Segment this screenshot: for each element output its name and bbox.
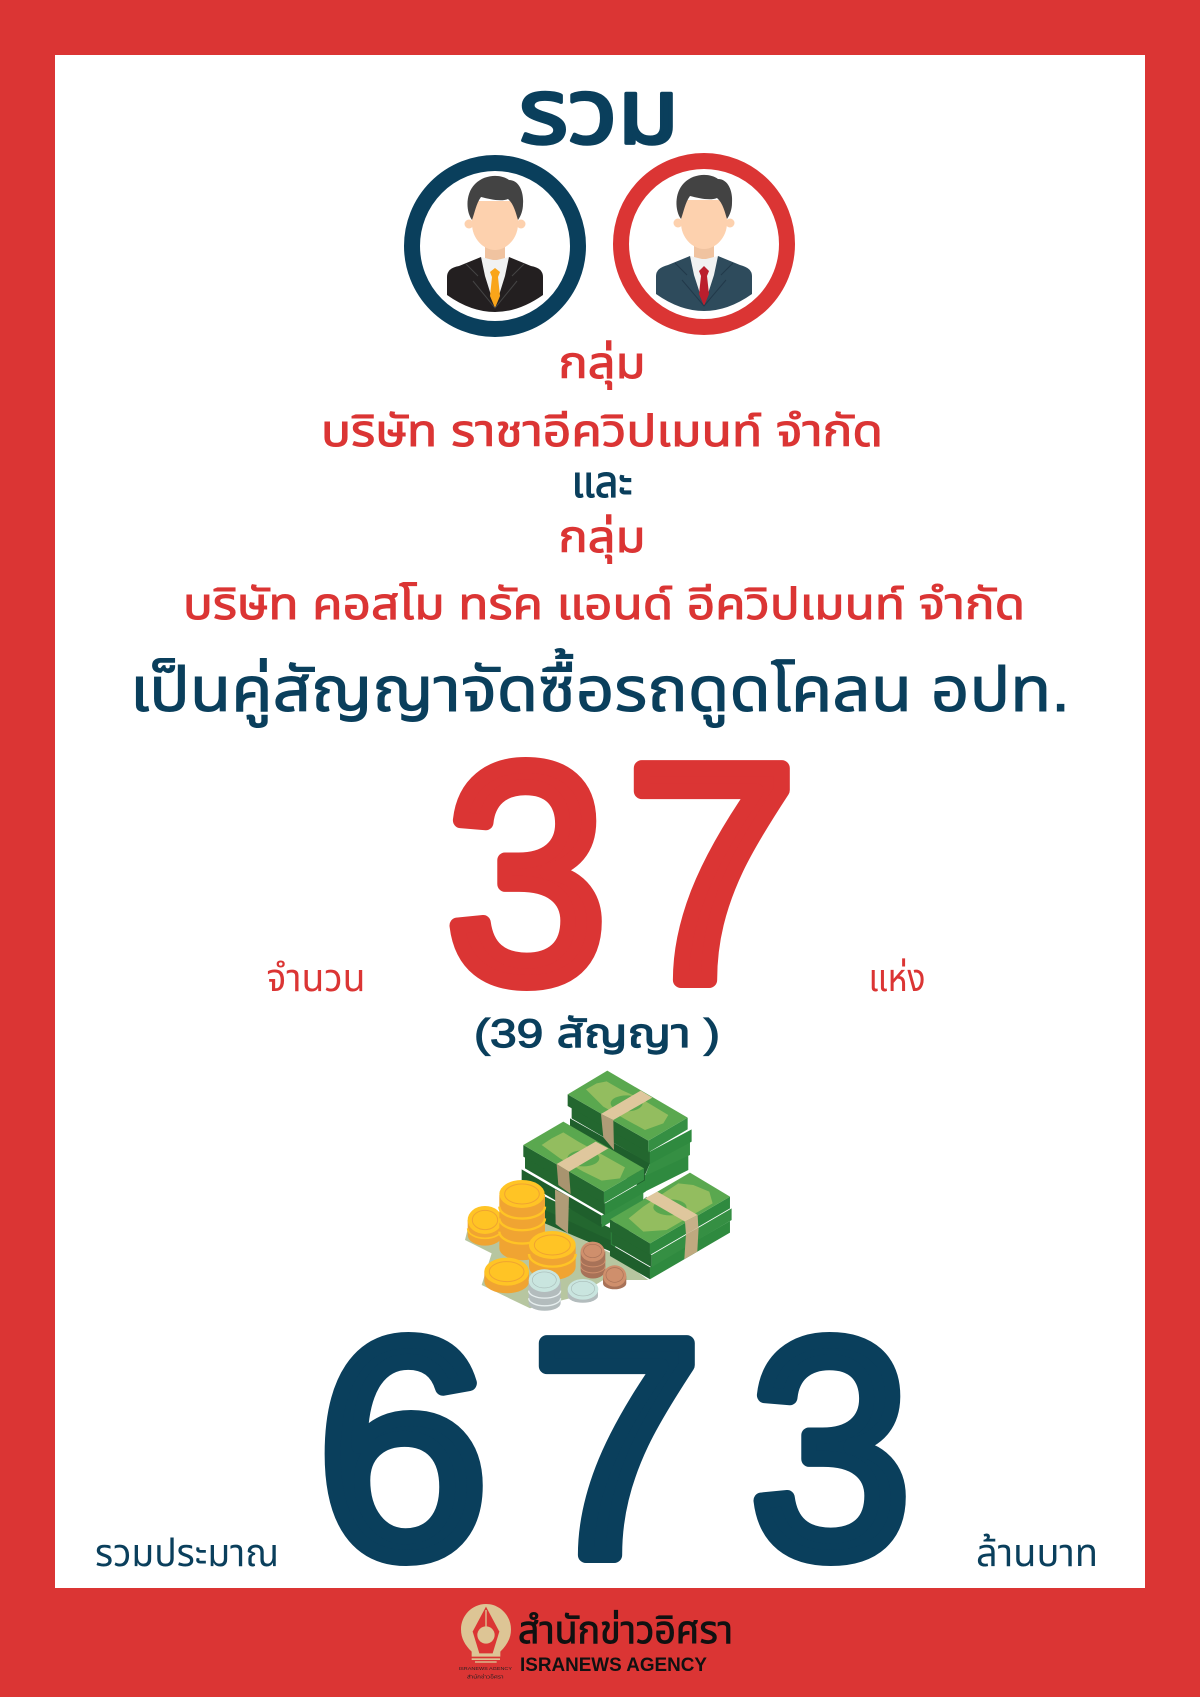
big number 37: 3 (446, 702, 607, 1046)
icon: businessman in red ring (621, 161, 787, 327)
gold coin stack left (468, 1206, 502, 1246)
copper coin stacks (581, 1242, 626, 1289)
label: total approx: รวมประมาณ (95, 1533, 279, 1575)
icon: businessman in navy ring (412, 163, 578, 329)
heading: group label 2: กลุ่ม (558, 513, 646, 564)
label: places: แห่ง (868, 958, 926, 1000)
big number 37: 7 (626, 702, 797, 1046)
heading: group label 1: กลุ่ม (558, 339, 646, 390)
text: and: และ (572, 458, 632, 507)
label: amount: จำนวน (266, 958, 366, 1000)
gold coin stack right (529, 1231, 576, 1280)
big number 673: 7 (531, 1277, 702, 1621)
heading: company 2: บริษัท คอสโม ทรัค แอนด์ อีควิปเมนท์ จำกัด (183, 580, 1025, 629)
silver coin stacks (529, 1269, 598, 1311)
label: million baht: ล้านบาท (976, 1533, 1098, 1575)
big number 673: 6 (317, 1277, 488, 1621)
icon: pen nib bulb emblem (459, 1604, 512, 1680)
sub-label: 39 contracts: (39 สัญญา ) (474, 1012, 720, 1056)
big number 673: 3 (750, 1277, 911, 1621)
icon: money stacks and coins (465, 1071, 732, 1311)
heading: company 1: บริษัท ราชาอีควิปเมนท์ จำกัด (321, 407, 883, 456)
gold coin stack tall (499, 1180, 545, 1260)
back banknote stack (568, 1071, 692, 1192)
icon: pen nib bulb emblem: สำนักข่าวอิศรา (467, 1673, 504, 1680)
stat: 673 million baht (95, 1277, 1098, 1621)
heading: contract statement: เป็นคู่สัญญาจัดซื้อรถดูดโคลน อปท. (130, 648, 1070, 728)
gold coin low (484, 1258, 529, 1293)
logo name English: ISRANEWS AGENCY (520, 1654, 707, 1676)
big number 37 (446, 702, 797, 1046)
shadow (465, 1222, 648, 1308)
title: รวม (519, 63, 679, 163)
front banknote stack (610, 1173, 732, 1279)
middle banknote stack (522, 1122, 647, 1252)
logo name Thai: สำนักข่าวอิศรา (518, 1610, 733, 1652)
icon: pen nib bulb emblem: ISRANEWS AGENCY (459, 1666, 512, 1671)
stat: 37 locations (266, 702, 926, 1046)
big number 673 (317, 1277, 911, 1621)
logo: Isranews Agency (459, 1604, 733, 1680)
